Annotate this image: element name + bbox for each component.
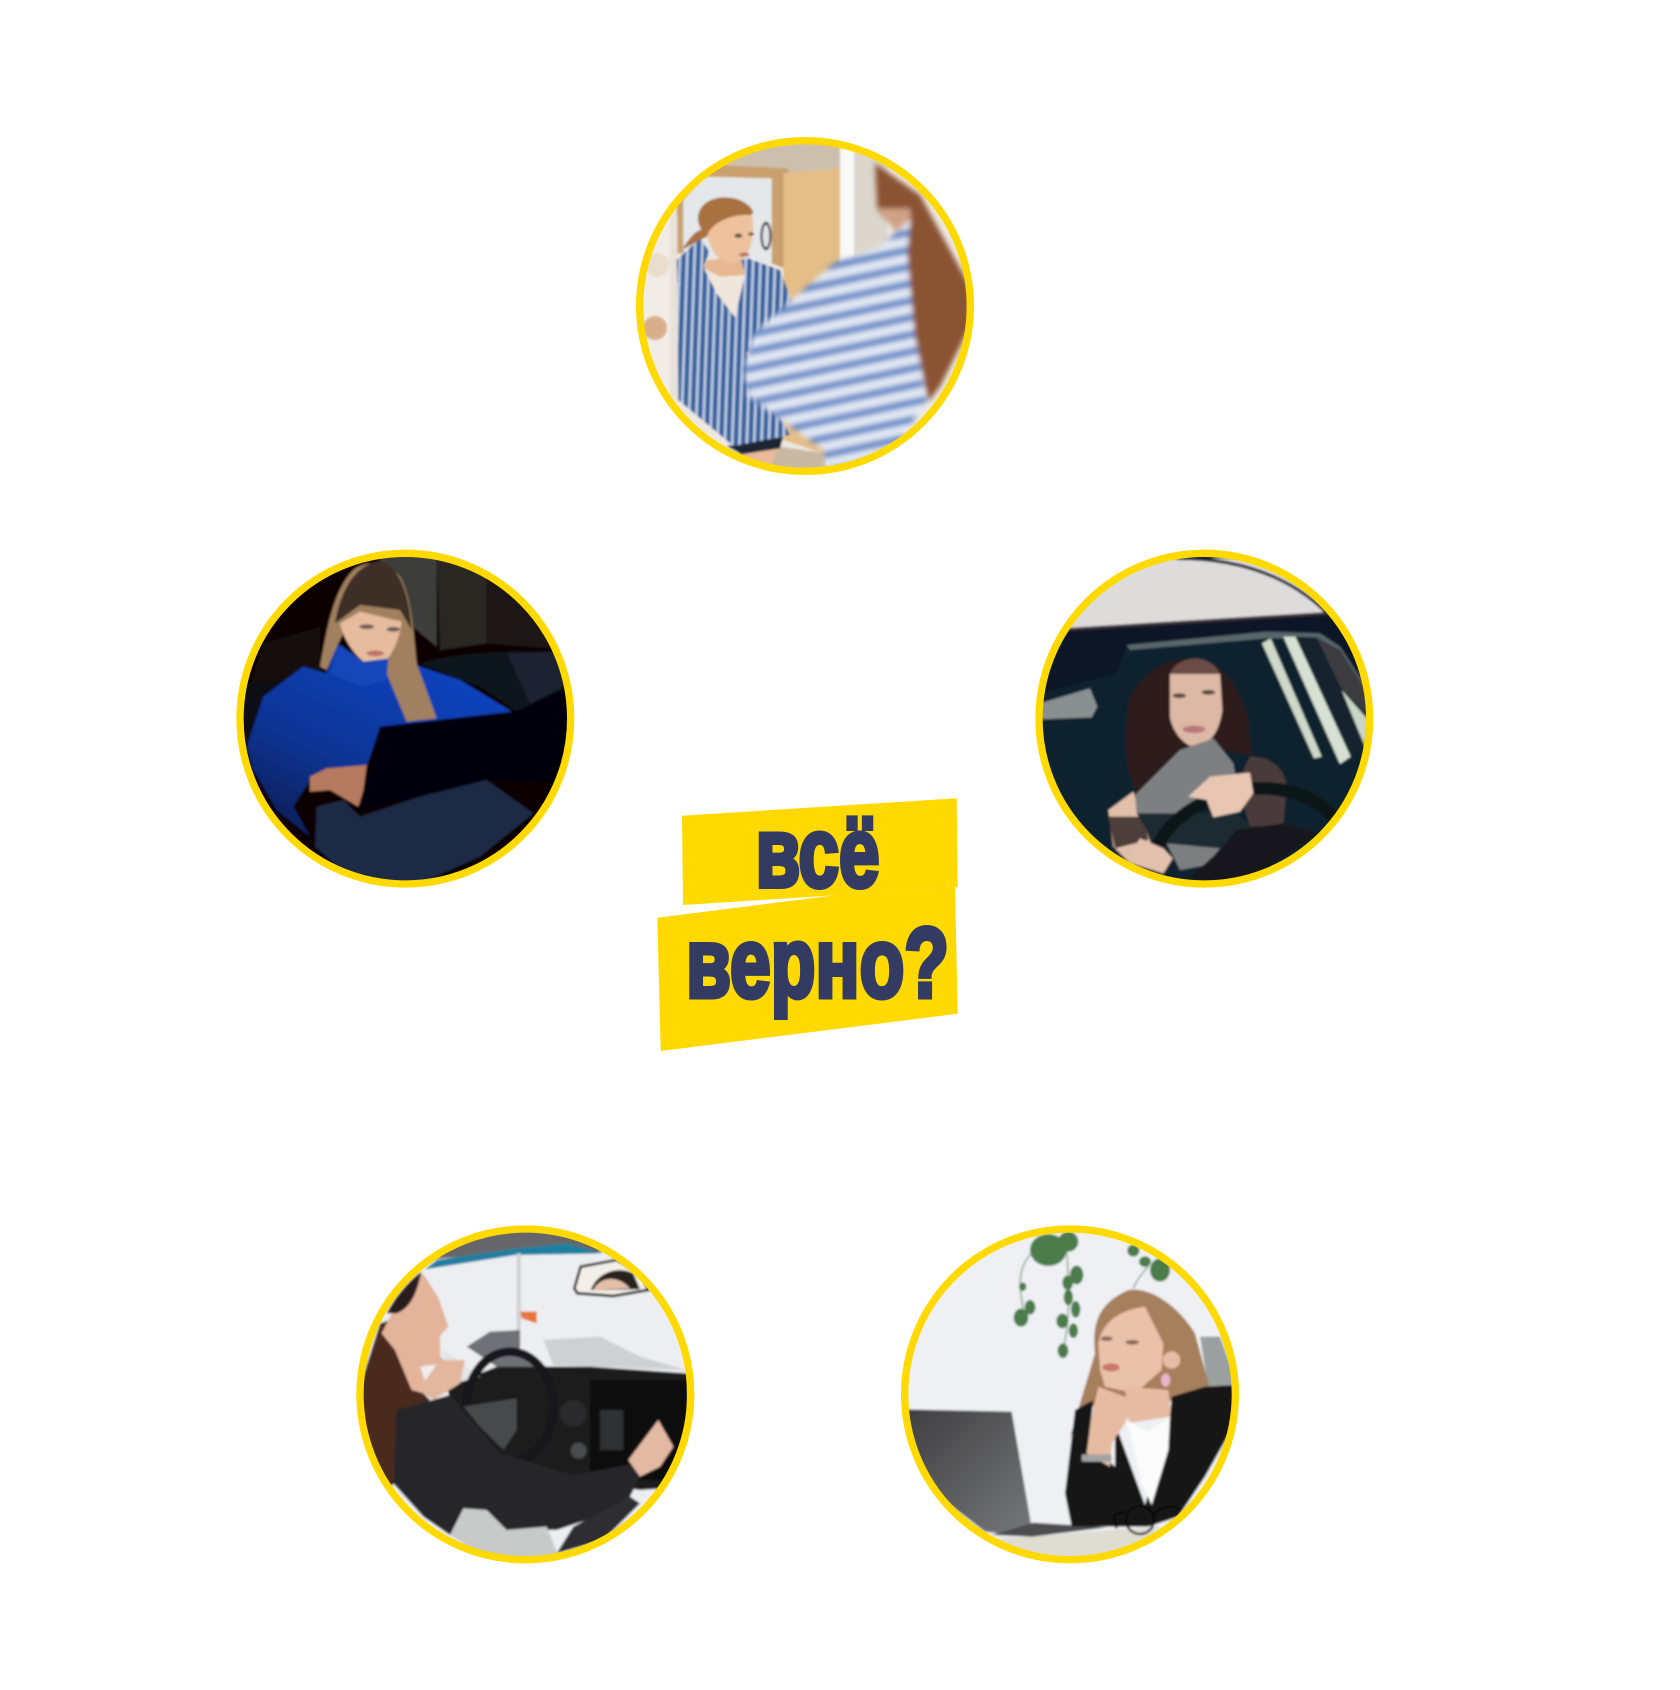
photo: girl with laptop in the dark [233, 547, 580, 893]
photo: woman adjusting car dashboard [353, 1227, 700, 1573]
yellow banner: top [682, 798, 958, 905]
ring [905, 1229, 1235, 1560]
ring [640, 141, 970, 471]
photo: bored woman looking at a laptop [898, 1227, 1245, 1573]
ring [360, 1229, 691, 1560]
heading line 2: верно? [686, 907, 949, 1018]
ring [1039, 553, 1370, 884]
heading line 1: всё [756, 796, 880, 908]
yellow banner: bottom [657, 887, 958, 1051]
title banner: всё верно? [657, 796, 958, 1051]
photo: woman driving seen through windscreen [1033, 547, 1380, 893]
photo: girl trying on a striped shirt at a mirror [633, 137, 977, 477]
ring [240, 553, 571, 884]
